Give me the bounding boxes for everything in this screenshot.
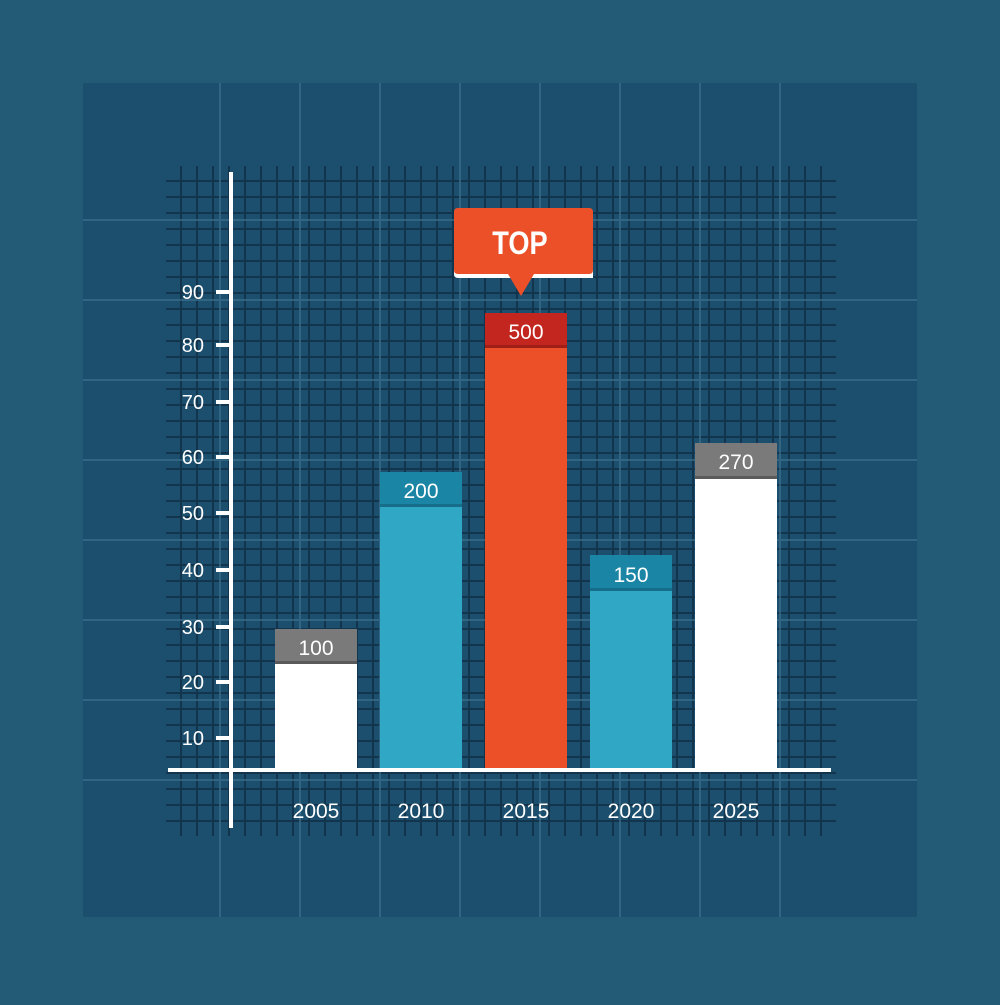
- y axis: 60: [182, 447, 204, 469]
- y axis: 40: [182, 560, 204, 582]
- y axis: [182, 172, 233, 828]
- x axis: [168, 768, 831, 823]
- panel: chart background: [83, 83, 917, 917]
- y axis: 10: [182, 728, 204, 750]
- callout: TOP: [454, 208, 593, 296]
- bar 2010: 200: [403, 480, 439, 503]
- bar 2015: 500: [508, 321, 544, 344]
- x axis: 2010: [398, 800, 444, 823]
- bar 2010: [380, 472, 462, 770]
- y axis: 80: [182, 335, 204, 357]
- x axis: 2025: [713, 800, 759, 823]
- bar 2005: 100: [298, 637, 334, 660]
- x axis: 2005: [293, 800, 339, 823]
- callout: TOP: TOP: [492, 226, 548, 262]
- x axis: 2015: [503, 800, 549, 823]
- x axis: 2020: [608, 800, 654, 823]
- y axis: 50: [182, 503, 204, 525]
- bar 2025: 270: [718, 451, 754, 474]
- y axis: 20: [182, 672, 204, 694]
- bar 2020: [590, 555, 672, 770]
- bar 2020: 150: [613, 564, 649, 587]
- bar 2025: [695, 443, 777, 770]
- y axis: 70: [182, 392, 204, 414]
- bar 2005: [275, 629, 357, 770]
- y axis: 90: [182, 282, 204, 304]
- bar 2015: [485, 313, 567, 770]
- y axis: 30: [182, 617, 204, 639]
